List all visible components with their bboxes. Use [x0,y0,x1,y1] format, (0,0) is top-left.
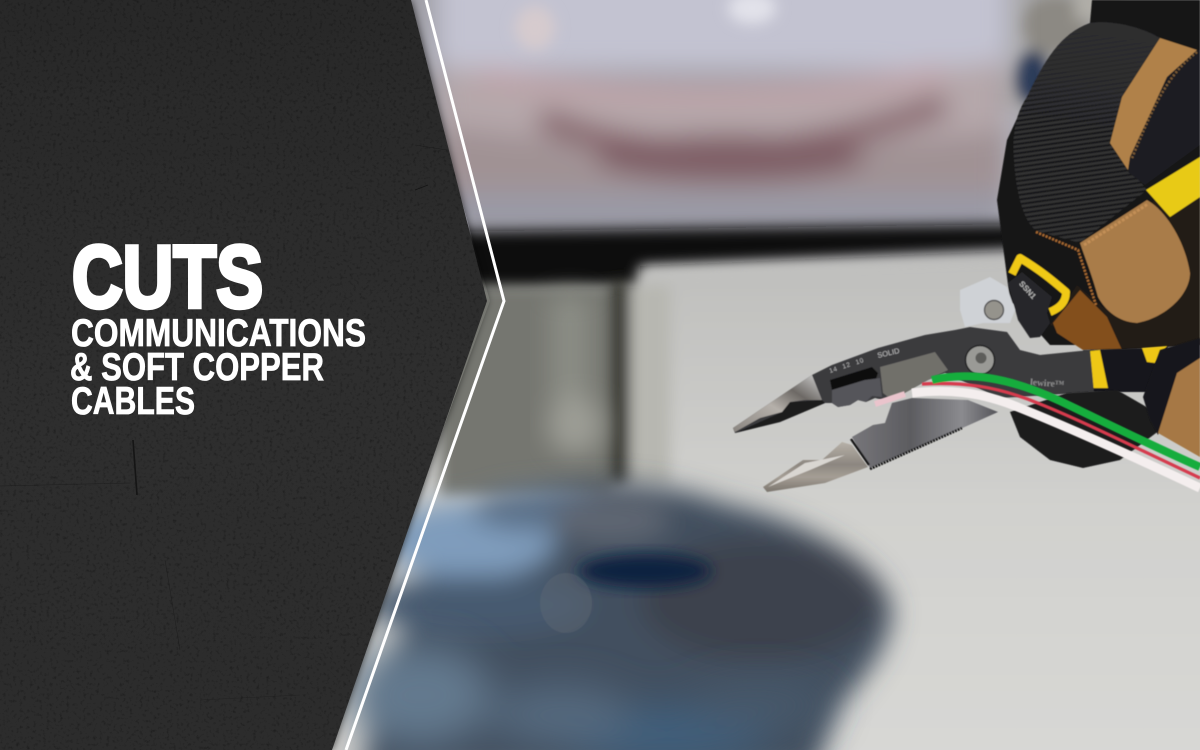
three wires [875,376,1200,488]
handle [1083,346,1168,392]
plier grip end black [1008,272,1052,338]
bolt centre [976,352,986,364]
blade-tip divider [851,439,869,465]
silver lock lever [960,277,1015,327]
pliers [733,327,1168,492]
subtitle: COMMUNICATIONS [71,312,366,355]
finger upper smooth shading [1018,22,1160,135]
blurred back wall and pole [440,252,1200,750]
blurred top wire spool [400,0,1120,260]
lower jaw blade [852,398,998,468]
lower blade serrated edge [870,428,962,469]
yellow handle stripes [1082,346,1167,388]
subtitle: & SOFT COPPER [70,346,324,389]
lock rivet [984,300,1004,320]
upper jaw slot [830,367,878,390]
SOLID mark: SOLID [876,346,901,360]
subtitle [70,312,366,423]
title: CUTS: CUTS [72,227,263,326]
blurred dark table band [430,224,1030,292]
spool highlights [515,0,776,50]
tan thumb tip [1080,200,1190,323]
blurred pale patch on wall [547,295,603,455]
reel lower body tones [350,645,830,750]
panel scratches [0,145,447,700]
band shadow between panel and white line [332,0,491,750]
black fabric finger [1013,22,1160,243]
grip lettering: SSN1 [1017,279,1038,301]
jaw translucent window [880,352,948,400]
glove seam stitching [1036,232,1096,305]
thumb stitching [1084,204,1148,245]
upper jaw dark serrated underside [735,400,825,433]
yellow wire tube [1146,157,1200,217]
upper jaw silver tip [733,375,822,432]
reel dark core [579,554,711,588]
right glove with tan patch [1143,338,1200,457]
upper plier body [733,327,1094,433]
brand mark: lewire™ [1030,378,1065,390]
blurred blue cable reel [360,483,892,750]
glove stitching [1132,52,1197,158]
size numerals: 14 12 10 [828,357,865,375]
subtitle: CABLES [71,380,195,423]
tan palm patch [1053,290,1122,350]
dark glove panel right [1128,50,1200,185]
lower jaw silver tip [763,442,868,492]
lower tip highlight [768,455,845,487]
palm underside brown [1050,180,1200,350]
lens bokeh spot [540,573,592,633]
spool colour bands [435,0,1010,224]
dark text panel [0,0,487,750]
white chevron line [346,0,504,750]
lower glove palm [1010,390,1160,468]
gloved hand [960,0,1200,350]
pivot bolt [966,346,994,374]
upper jaw teeth [832,378,882,407]
hand dark silhouette [997,0,1200,345]
yellow grip loop [1012,258,1066,312]
tan leather upper patch [1110,38,1197,170]
